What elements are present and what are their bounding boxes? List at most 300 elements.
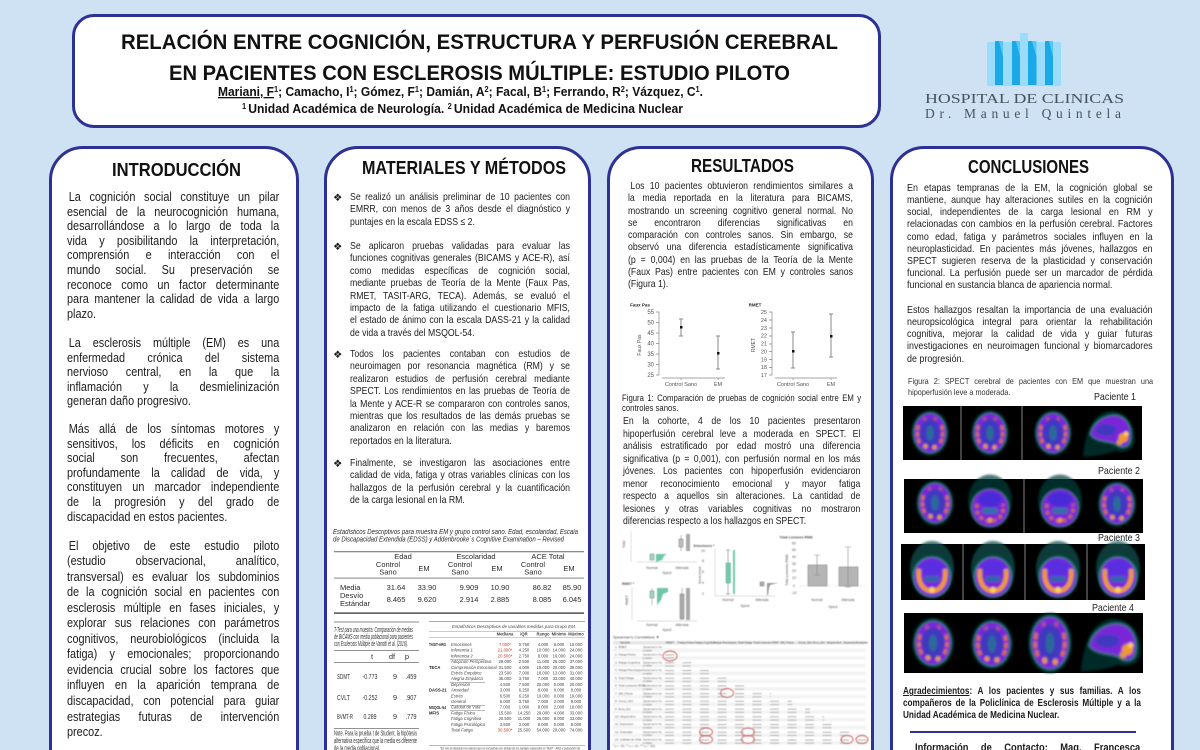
text: resultados párrafo 2: En la cohorte, 4 de los 10 pacientes presentaron xyxy=(623,415,860,427)
table: estadísticos del grupo EM: 20.000 xyxy=(537,682,550,687)
table: estadísticos del grupo EM: 9.000 xyxy=(571,699,582,704)
chart: raincloud plot top-left: Total xyxy=(622,540,626,548)
text: conclusiones párrafo 1: neuroplasticidad. En pacientes más jóvenes, hallazgos en xyxy=(907,243,1153,255)
text: introducción párrafo 3: profundamente la calidad de vida, y xyxy=(67,466,279,480)
label: Paciente 4: Paciente 4 xyxy=(1092,602,1134,614)
text: resultados párrafo 2: diferencias respecto a los hallazgos en SPECT. xyxy=(623,515,806,527)
text: conclusiones párrafo 2: investigaciones en neuroimagen funcional y biomarcadores xyxy=(907,340,1153,352)
chart: RMET: 23 xyxy=(761,326,767,332)
bullet 3: la Mente y ACE-R se compararon con controles sanos, xyxy=(350,398,570,410)
table: estadísticos del grupo EM: 4.500 xyxy=(500,682,511,687)
table: estadísticos del grupo EM: Inferencia 2 xyxy=(451,653,474,658)
table: estadísticos del grupo EM: 2.500 xyxy=(519,659,530,664)
table: estadísticos del grupo EM: 10.000 xyxy=(537,648,550,653)
table: correlaciones de Spearman: p-value xyxy=(643,741,652,745)
table: estadísticos del grupo EM: Adopción Perspectiva xyxy=(450,659,492,664)
table: t-test: .907 xyxy=(406,693,416,702)
text: introducción párrafo 2: inflamación y la desmielinización xyxy=(67,380,279,394)
table: t-test: alternativa específica que la media es diferente xyxy=(334,738,417,745)
chart: RMET: 24 xyxy=(761,318,767,324)
label: Paciente 2: Paciente 2 xyxy=(1098,465,1140,477)
chart: RMET: 25 xyxy=(761,310,767,316)
panel: materiales y métodos xyxy=(324,146,591,750)
table: estadísticos del grupo EM: 54.000 xyxy=(537,728,550,732)
text: resultados párrafo 1: (p = 0,004) en las pruebas de la Teoría de la Mente xyxy=(628,254,853,266)
table: estadísticos del grupo EM: Depresión xyxy=(451,682,471,687)
table: estadísticos del grupo EM: 4.250 xyxy=(519,648,530,653)
text: introducción párrafo 3: Más allá de los síntomas motores y xyxy=(69,422,279,436)
table: correlaciones de Spearman: 6. Total Lesiones RNM xyxy=(615,684,646,688)
logo text xyxy=(925,91,1124,121)
table: estadísticos del grupo EM: 8.000 xyxy=(538,688,549,693)
authors: . xyxy=(700,84,703,99)
image: SPECT Paciente 1 xyxy=(903,406,1142,460)
text: conclusiones párrafo 2: Estos hallazgos resaltan la importancia de una evaluación xyxy=(907,304,1153,316)
chart: RMET: 18 xyxy=(761,365,767,371)
table: estadísticos del grupo EM: 11.000 xyxy=(518,716,531,721)
authors: ; Vázquez, C xyxy=(625,84,696,99)
text: resultados párrafo 1: (Faux Pas) entre pacientes con EM y controles sanos xyxy=(628,266,853,278)
table: estadísticos descriptivos: Media xyxy=(340,583,361,592)
table: estadísticos del grupo EM: Inferencia 1 xyxy=(451,648,473,653)
table: correlaciones de Spearman: Fatiga Física xyxy=(678,641,694,645)
text: introducción párrafo 1 xyxy=(67,190,280,321)
table: estadísticos descriptivos: Sano xyxy=(379,568,397,576)
chart: raincloud plot bottom-left xyxy=(622,582,697,632)
text: introducción párrafo 4: esclerosis múltiple en fases iniciales, y xyxy=(67,601,279,615)
chart: raincloud plot bottom-left: RMET xyxy=(625,594,629,605)
table: estadísticos descriptivos: Edad xyxy=(394,552,412,561)
text: introducción párrafo 1: para mantener la calidad de vida a largo xyxy=(67,292,279,306)
table: correlaciones de Spearman: 9. Emo_Dcr xyxy=(615,707,631,711)
table: correlaciones de Spearman: Spearman's rho xyxy=(643,722,662,726)
table: estadísticos del grupo EM: Estrés Empático xyxy=(451,670,482,676)
table: correlaciones de Spearman: 3. Fatiga Cognitiva xyxy=(615,660,640,664)
table: estadísticos descriptivos: Desvío xyxy=(340,591,363,600)
table: correlaciones de Spearman: p-value xyxy=(643,733,652,737)
table: correlaciones de Spearman: p-value xyxy=(643,664,652,668)
authors: ; Facal, B xyxy=(489,84,542,99)
table: estadísticos descriptivos: EM xyxy=(491,564,503,573)
table: estadísticos del grupo EM: Fatiga Física xyxy=(451,710,476,715)
image: SPECT Paciente 2 xyxy=(904,475,1143,533)
table: correlaciones de Spearman: Spearman's rho xyxy=(643,691,662,695)
logo: Hospital de Clínicas xyxy=(925,33,1124,121)
chart: Faux Pas: 50 xyxy=(647,320,655,326)
text: introducción párrafo 2 xyxy=(67,336,280,408)
table: estadísticos del grupo EM: 40.000 xyxy=(570,676,583,681)
chart: RMET: 21 xyxy=(761,342,767,348)
table: correlaciones de Spearman: Total Fatiga xyxy=(738,641,753,645)
authors: 1 xyxy=(349,85,354,94)
authors: 2 xyxy=(621,85,625,94)
chart: Faux Pas: 35 xyxy=(647,352,655,358)
table: t-test: t xyxy=(371,652,374,661)
text: resultados párrafo 1: observó una diferencia estadísticamente significativa xyxy=(628,241,853,253)
table: t-test: CVLT xyxy=(337,693,350,702)
table: estadísticos descriptivos: de Discapacidad Extendida (EDSS) y Addenbrooke´s Cognitive Examination – Revised xyxy=(333,536,565,544)
table: correlaciones de Spearman: 2. Fatiga Física xyxy=(615,653,636,657)
table: estadísticos del grupo EM: 3.750 xyxy=(519,699,530,704)
table: estadísticos descriptivos: ACE Total xyxy=(531,552,565,561)
table: correlaciones de Spearman: p-value xyxy=(643,672,652,676)
affiliations: 1 xyxy=(242,102,248,111)
chart: Total Lesiones RNM bars: Total Lesiones RNM xyxy=(779,536,813,540)
table: estadísticos del grupo EM: MFIS xyxy=(429,710,439,716)
table: estadísticos del grupo EM: 0.000 xyxy=(554,722,565,727)
chart: Emociones boxplot xyxy=(693,544,778,608)
table: estadísticos descriptivos: 8.085 xyxy=(533,595,551,604)
chart: Emociones boxplot: 2 xyxy=(702,592,704,596)
table: t-test: -0.252 xyxy=(362,693,378,702)
chart: Total Lesiones RNM bars: -10 xyxy=(791,591,797,595)
table: estadísticos descriptivos: Control xyxy=(521,560,545,569)
text: introducción párrafo 4: de la cognición social en pacientes con xyxy=(67,585,279,599)
table: correlaciones de Spearman: 12. Ansiedad xyxy=(615,730,633,734)
heading: materiales y métodos: MATERIALES Y MÉTODOS xyxy=(362,157,566,178)
table: estadísticos del grupo EM: TECA xyxy=(429,665,440,670)
caption: figura 1: Figura 1: Comparación de pruebas de cognición social entre EM y xyxy=(622,393,861,403)
text: introducción párrafo 4: fatiga) y emocionales; proporcionando xyxy=(67,647,279,661)
table: estadísticos del grupo EM: 20.000 xyxy=(553,728,566,732)
chart: Emociones boxplot: 8 xyxy=(702,559,704,563)
table: estadísticos del grupo EM: Estrés xyxy=(451,693,464,698)
table: t-test: con Esclerosis Múltiple de Vanotti et al. (2016). xyxy=(334,641,408,648)
table: estadísticos del grupo EM: 0.750 xyxy=(519,642,530,647)
chart: Faux Pas: 45 xyxy=(647,331,655,337)
table: t-test: df xyxy=(389,652,396,661)
panel: conclusiones xyxy=(890,146,1174,750)
table: estadísticos descriptivos: Estándar xyxy=(340,599,371,608)
text: conclusiones párrafo 1: funcional en sustancia blanca de apariencia normal. xyxy=(907,279,1112,291)
authors: Mariani, F xyxy=(218,84,274,99)
table: estadísticos del grupo EM: Máximo xyxy=(568,632,584,636)
table: estadísticos del grupo EM: Estadísticos Descriptivos de variables medidas para Grupo EM. xyxy=(452,624,576,629)
table: estadísticos descriptivos: Control xyxy=(376,560,400,569)
chart: Total Lesiones RNM bars: 30 xyxy=(792,562,796,566)
table: t-test: BVMT-R xyxy=(337,712,353,721)
table: correlaciones de Spearman: Spearman's rho xyxy=(643,699,662,703)
image: SPECT Paciente 3 xyxy=(901,541,1145,600)
table: estadísticos del grupo EM: 2.750 xyxy=(519,653,530,658)
table: correlaciones de Spearman: p-value xyxy=(643,687,652,691)
chart: Faux Pas: Faux Pas xyxy=(630,302,650,308)
bullet 2: impacto de la fatiga utilizando el cuestionario MFIS, xyxy=(350,302,570,314)
table: estadísticos del grupo EM: 25.500 xyxy=(518,728,531,732)
text: agradecimientos: Unidad Académica de Medicina Nuclear. xyxy=(903,709,1059,721)
bullet 3: mientras que los resultados de las demás pruebas se xyxy=(350,410,570,422)
text: introducción párrafo 1: comprensión e interacción con el xyxy=(67,248,279,262)
text: introducción párrafo 4: precoz. xyxy=(67,725,103,739)
table: correlaciones de Spearman: 13. Calidad de Vida xyxy=(615,738,641,742)
title xyxy=(121,29,838,85)
chart: Emociones boxplot: Emociones xyxy=(698,566,702,584)
table: estadísticos del grupo EM: 3.000 xyxy=(500,688,511,693)
text: conclusiones párrafo 1: SPECT sugieren reserva de la plasticidad y conservación xyxy=(907,255,1153,267)
bullet 2: el estado de ánimo con la escala DASS-21 y la calidad xyxy=(350,314,570,326)
table: estadísticos del grupo EM: 19.000 xyxy=(537,665,550,670)
text: introducción párrafo 4: discapacidad, con potencial para guiar xyxy=(67,694,279,708)
bullets: ❖ xyxy=(333,458,342,470)
authors: ; Gómez, F xyxy=(354,84,415,99)
chart: RMET: RMET xyxy=(751,338,757,352)
text: resultados párrafo 1: la media reportada en la literatura para BICAMS, xyxy=(628,192,853,204)
icon: hospital bars xyxy=(987,33,1061,86)
table: t-test: de BICAMS con media poblacional para pacientes xyxy=(334,634,413,641)
table: estadísticos del grupo EM: 21.000* xyxy=(498,648,513,653)
table: estadísticos del grupo EM: 20.000 xyxy=(553,665,566,670)
table: estadísticos del grupo EM: 33.000 xyxy=(570,710,583,715)
table: estadísticos del grupo EM: 8.000 xyxy=(571,688,582,693)
chart: RMET: 19 xyxy=(761,357,767,363)
bullet 3: neuroimagen por resonancia magnética (RM) y se xyxy=(350,360,570,372)
text: resultados párrafo 2 xyxy=(622,415,860,527)
table: estadísticos descriptivos: 85.90 xyxy=(563,583,581,592)
table: estadísticos del grupo EM: Calidad de Vida xyxy=(451,705,481,710)
text: introducción párrafo 4: estrategias futuras de intervención xyxy=(67,710,279,724)
text: introducción párrafo 4: evidencia crucial sobre los factores que xyxy=(67,663,279,677)
chart: Total Lesiones RNM bars: Normal xyxy=(811,598,823,602)
chart: Total Lesiones RNM bars: 50 xyxy=(792,548,796,552)
table: t-test: 9 xyxy=(393,693,397,702)
text: introducción párrafo 4: (estudio observacional, analítico, xyxy=(67,554,279,568)
table: t-test: 9 xyxy=(393,712,397,721)
table: estadísticos del grupo EM: 7.000 xyxy=(538,699,549,704)
table: estadísticos del grupo EM: 6.000 xyxy=(554,642,565,647)
table: estadísticos del grupo EM: 0.000 xyxy=(554,688,565,693)
table: correlaciones de Spearman: Spearman's rho xyxy=(643,645,662,649)
bullets xyxy=(333,192,342,470)
text: agradecimientos xyxy=(903,685,1141,721)
table: estadísticos descriptivos xyxy=(333,529,584,614)
table: estadísticos del grupo EM: 11.000 xyxy=(537,659,550,664)
table: t-test: .459 xyxy=(406,672,416,681)
authors: 1 xyxy=(542,85,547,94)
table: correlaciones de Spearman: 1. RMET xyxy=(615,645,627,649)
bullet 1: EMRR, con menos de 3 años desde el diagnóstico y xyxy=(350,203,570,215)
table: t-test: 0.289 xyxy=(364,712,376,721)
table: correlaciones de Spearman: Comp_Sint xyxy=(798,641,812,645)
table: correlaciones de Spearman: p-value xyxy=(643,702,652,706)
caption: figura 1: controles sanos. xyxy=(622,402,678,412)
chart: Total Lesiones RNM bars xyxy=(779,536,866,609)
chart: raincloud plot top-left xyxy=(622,531,697,575)
table: estadísticos del grupo EM: 35.000 xyxy=(499,676,512,681)
table: correlaciones de Spearman: p-value xyxy=(643,710,652,714)
bullet 2: Se aplicaron pruebas validadas para evaluar las xyxy=(350,240,570,252)
chart: raincloud plot bottom-left: Alterada xyxy=(675,623,689,627)
table: t-test: T-Test para una muestra. Comparación de medias xyxy=(334,627,413,634)
bullet 2: funciones cognitivas generales (BICAMS y ACE-R), así xyxy=(350,252,570,264)
text: conclusiones párrafo 1: En etapas tempranas de la EM, la cognición global se xyxy=(907,182,1153,194)
chart: Emociones boxplot: Emociones * xyxy=(693,544,715,548)
table: estadísticos del grupo EM: 1.000 xyxy=(519,705,530,710)
chart: Faux Pas: 25 xyxy=(647,373,655,379)
table: correlaciones de Spearman: 4. Fatiga Psicológica xyxy=(615,668,643,672)
table: estadísticos del grupo EM: 8.000 xyxy=(538,705,549,710)
text: introducción párrafo 1: La cognición social constituye un pilar xyxy=(69,190,279,204)
text: conclusiones párrafo 2: de progresión. xyxy=(907,353,964,365)
table: estadísticos descriptivos: 8.465 xyxy=(387,595,405,604)
table: estadísticos del grupo EM: 25.000 xyxy=(537,716,550,721)
bullet 4: hallazgos de la perfusión cerebral y la cuantificación xyxy=(350,482,570,494)
authors: 2 xyxy=(485,85,489,94)
table: estadísticos del grupo EM: 7.000 xyxy=(538,676,549,681)
caption: figura 2 xyxy=(908,376,1154,397)
table: estadísticos descriptivos: Escolaridad xyxy=(456,552,496,561)
chart: RMET: 22 xyxy=(761,334,767,340)
table: correlaciones de Spearman: p-value xyxy=(643,726,652,730)
chart: Total Lesiones RNM bars: 60 xyxy=(792,542,796,546)
table: correlaciones de Spearman: Spearman's Correlations ▼ xyxy=(613,636,659,640)
table: correlaciones de Spearman: Spearman's rho xyxy=(643,714,662,718)
chart: Emociones boxplot: 6 xyxy=(702,570,704,574)
table: estadísticos del grupo EM: 7.000 xyxy=(500,705,511,710)
table: estadísticos descriptivos: EM xyxy=(418,564,430,573)
table: estadísticos descriptivos: EM xyxy=(563,564,575,573)
text: introducción párrafo 1: desarrollándose a lo largo de toda la xyxy=(67,219,279,233)
logo text: HOSPITAL DE CLINICAS xyxy=(925,91,1124,106)
text: introducción párrafo 4: El objetivo de este estudio piloto xyxy=(69,538,279,552)
table: correlaciones de Spearman: Total Lesiones RNM xyxy=(753,641,779,645)
chart: Total Lesiones RNM bars: 10 xyxy=(792,576,796,580)
text: introducción párrafo 3: social son frecuentes, afectan xyxy=(67,451,279,465)
table: estadísticos del grupo EM: 30.500* xyxy=(498,728,513,732)
table: estadísticos del grupo EM: 6.250 xyxy=(519,688,530,693)
table: estadísticos del grupo EM: 3.750 xyxy=(519,676,530,681)
table: correlaciones de Spearman: Variable xyxy=(620,641,630,645)
table: estadísticos del grupo EM: TASIT-ARG xyxy=(429,642,446,647)
table: estadísticos descriptivos: Control xyxy=(448,560,472,569)
table: estadísticos del grupo EM: 10.000 xyxy=(570,642,583,647)
table: correlaciones de Spearman: Spearman's rho xyxy=(643,738,662,742)
bullets: ❖ xyxy=(333,241,342,253)
table: correlaciones de Spearman: 5. Total Fatiga xyxy=(615,676,634,680)
table: estadísticos del grupo EM: MSQOL-54 xyxy=(429,705,447,710)
bullet 4: Finalmente, se investigaron las asociaciones entre xyxy=(350,457,570,469)
table: estadísticos descriptivos: 9.909 xyxy=(460,583,478,592)
table: estadísticos del grupo EM: 7.000 xyxy=(519,670,530,676)
chart: Total Lesiones RNM bars: 20 xyxy=(792,569,796,573)
text: introducción párrafo 3: de la progresión y del grado de xyxy=(67,495,279,509)
affiliations: Unidad Académica de Neurología. xyxy=(248,101,448,116)
table: estadísticos del grupo EM xyxy=(429,621,585,750)
table: estadísticos descriptivos: 10.90 xyxy=(491,583,509,592)
bullet 3: reportados en la literatura. xyxy=(350,435,452,447)
bullet 3: SPECT. Los rendimientos en las pruebas de Teoría de xyxy=(350,385,570,397)
chart: raincloud plot bottom-left: Spect xyxy=(663,628,672,632)
table: estadísticos del grupo EM: 8.000 xyxy=(538,653,549,658)
table: estadísticos del grupo EM: 29.000 xyxy=(537,710,550,715)
text: introducción párrafo 1: esencial de la neurocognición humana, xyxy=(67,205,279,219)
table: estadísticos descriptivos: 9.620 xyxy=(418,595,436,604)
text: introducción párrafo 2: La esclerosis múltiple (EM) es una xyxy=(69,336,279,350)
table: estadísticos del grupo EM: 8.000 xyxy=(571,722,582,727)
table: correlaciones de Spearman: Alegría Emt xyxy=(827,641,842,645)
table: t-test: p xyxy=(405,652,409,661)
table: estadísticos descriptivos: 6.045 xyxy=(563,595,581,604)
text: conclusiones párrafo 2 xyxy=(907,304,1153,365)
chart: Emociones boxplot: Alterada xyxy=(755,598,769,602)
bullet 4: de la carga lesional en la RM. xyxy=(350,494,465,506)
affiliations: 2 xyxy=(448,102,454,111)
header banner xyxy=(72,14,881,128)
text: resultados párrafo 1: Los 10 pacientes obtuvieron rendimientos similares a xyxy=(630,180,853,192)
table: estadísticos del grupo EM: 33.000 xyxy=(553,676,566,681)
table: estadísticos descriptivos: 86.82 xyxy=(533,583,551,592)
bullet 2 xyxy=(350,240,570,339)
heading: introducción: INTRODUCCIÓN xyxy=(112,159,241,180)
chart: RMET: EM xyxy=(827,382,836,388)
chart: Total Lesiones RNM bars: Total Lesiones RNM xyxy=(785,554,789,586)
table: estadísticos del grupo EM: 16.000 xyxy=(553,653,566,658)
heading: conclusiones: CONCLUSIONES xyxy=(968,157,1089,177)
table: correlaciones de Spearman: p-value xyxy=(643,718,652,722)
text: resultados párrafo 2: menor reconocimiento emocional y mayor fatiga xyxy=(623,478,860,490)
image: SPECT Paciente 4 xyxy=(904,613,1143,673)
table: estadísticos del grupo EM: 0.000 xyxy=(554,682,565,687)
label: Paciente 1: Paciente 1 xyxy=(1094,391,1136,403)
table: correlaciones de Spearman: Spearman's rho xyxy=(643,707,662,711)
text: resultados párrafo 1: comparación con controles sanos. Sin embargo, se xyxy=(628,229,853,241)
table: estadísticos del grupo EM: 2.000 xyxy=(554,699,565,704)
title: RELACIÓN ENTRE COGNICIÓN, ESTRUCTURA Y PERFUSIÓN CEREBRAL xyxy=(121,29,838,54)
table: correlaciones de Spearman: p-value xyxy=(643,656,652,660)
chart: Total Lesiones RNM bars: 40 xyxy=(792,555,796,559)
table: estadísticos del grupo EM: 7.000* xyxy=(499,642,511,647)
table: estadísticos del grupo EM: Rango xyxy=(536,632,550,636)
table: t-test xyxy=(334,622,419,750)
table: t-test: 9 xyxy=(393,672,397,681)
chart: RMET: RMET xyxy=(749,302,762,308)
table: t-test: SDMT xyxy=(337,672,350,681)
table: estadísticos del grupo EM: IQR xyxy=(520,632,528,636)
text: conclusiones párrafo 1: mantiene, aunque hay alteraciones sutiles en la cognición xyxy=(907,194,1153,206)
table: correlaciones de Spearman: Spearman's rho xyxy=(643,660,662,664)
chart: RMET: Control Sano xyxy=(777,382,809,388)
table: correlaciones de Spearman: Spearman's rho xyxy=(643,676,662,680)
chart: RMET: 20 xyxy=(761,349,767,355)
chart: Emociones boxplot: Normal xyxy=(722,598,734,602)
table: correlaciones de Spearman: Emo_Dcr xyxy=(813,641,825,645)
chart: Faux Pas: EM xyxy=(714,382,723,388)
chart: Total Lesiones RNM bars: Alterada xyxy=(841,598,855,602)
table: correlaciones de Spearman: p-value xyxy=(643,679,652,683)
bullets: ❖ xyxy=(333,349,342,361)
text: introducción párrafo 2: generan daño progresivo. xyxy=(67,394,191,408)
table: correlaciones de Spearman: Spearman's rho xyxy=(643,730,662,734)
chart: RMET: 17 xyxy=(761,373,767,379)
table: estadísticos del grupo EM: 19.000 xyxy=(570,693,583,698)
table: correlaciones de Spearman: 10. Alegría Emt xyxy=(615,714,636,718)
text: introducción párrafo 4 xyxy=(67,538,280,739)
table: estadísticos del grupo EM: 7.500 xyxy=(519,682,530,687)
text: introducción párrafo 3 xyxy=(67,422,280,524)
bullet 3: analizaron en relación con las medias y baremos xyxy=(350,422,570,434)
text: conclusiones párrafo 1 xyxy=(907,182,1153,291)
table: estadísticos del grupo EM: 4.000 xyxy=(519,665,530,670)
text: conclusiones párrafo 2: neuropsicológica integral para orientar la rehabilitación xyxy=(907,316,1153,328)
bullet 3 xyxy=(350,348,570,447)
table: estadísticos del grupo EM: 4.000 xyxy=(554,710,565,715)
bullet 3: realizaron estudios de perfusión cerebral mediante xyxy=(350,373,570,385)
table: estadísticos del grupo EM: Alegría Empática xyxy=(450,676,484,681)
title: EN PACIENTES CON ESCLEROSIS MÚLTIPLE: ESTUDIO PILOTO xyxy=(169,60,790,85)
table: estadísticos del grupo EM: 20.500 xyxy=(499,716,512,721)
table: correlaciones de Spearman: Spearman's rho xyxy=(643,668,662,672)
chart: Faux Pas: Faux Pas xyxy=(637,334,643,356)
logo text: Dr. Manuel Quintela xyxy=(925,106,1121,121)
